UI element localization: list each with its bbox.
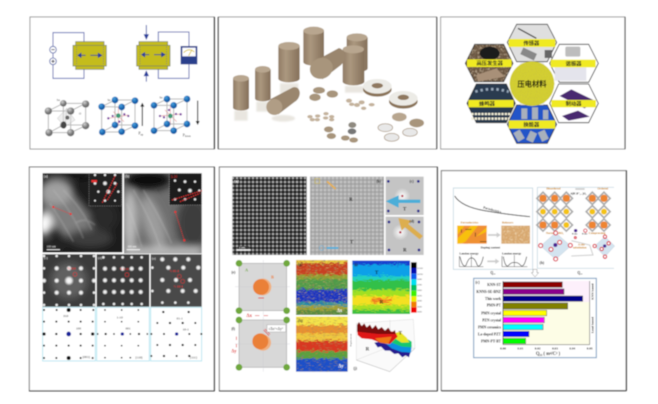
simulated pattern (h)	[150, 307, 202, 361]
bar chart (c): 0.03	[552, 346, 558, 350]
TEM image (b): 100 nm	[127, 244, 137, 248]
colour scale bar: 0.000	[417, 312, 422, 314]
bar chart (c): 0.01	[517, 346, 524, 350]
electron diffraction pattern (c)	[41, 254, 97, 307]
unit cell schematic (f): √Δx²+Δy²	[268, 327, 284, 331]
colour scale bar: 0.800	[417, 290, 422, 292]
phase diagram (a): Paraelectrics	[483, 205, 502, 214]
crystal structure (b): A-site	[578, 243, 585, 246]
unit cell schematic (f)	[231, 317, 290, 372]
bar chart (c): (c)	[475, 280, 480, 285]
bar chart (c): This work	[485, 297, 502, 301]
crystal structure (b): B site	[582, 233, 587, 236]
bar chart (c): 0.00	[500, 346, 506, 350]
panel: applications of piezoelectric materials hexagon diagram	[441, 17, 625, 149]
phase diagram (a): Q₃₃	[490, 271, 496, 275]
displacement heat map (g)	[295, 259, 348, 316]
delta x label: Δx	[246, 314, 252, 319]
floor reflections	[234, 83, 363, 122]
simulated pattern (g): 001	[126, 326, 131, 330]
hexagon: high-voltage generator: 高压发生器	[476, 59, 504, 67]
panel: TEM images and diffraction patterns	[29, 167, 214, 391]
polarisation contour map (i): R	[380, 300, 384, 305]
electron diffraction pattern (c): ½ 110	[68, 267, 76, 271]
simulated pattern (g)	[97, 307, 149, 361]
colour scale bar: 0.0720	[417, 274, 423, 276]
colour scale bar: 0.780	[417, 285, 422, 287]
unit cell schematic (f): Δy	[231, 350, 237, 355]
STEM image (b): (b)	[376, 179, 382, 183]
bar chart (c): Lead based	[590, 317, 594, 333]
phase diagram (a)	[453, 188, 533, 275]
TEM image (a): 100 nm	[47, 245, 56, 249]
polarisation contour map (i)	[352, 260, 411, 315]
phase diagram (a): Ferroelectrics	[461, 220, 479, 224]
electron diffraction pattern (e): ½ 01-1	[170, 269, 179, 273]
simulated pattern (h): [111]	[190, 356, 197, 360]
hexagon: buzzer	[467, 84, 515, 123]
panel: piezoelectric effect schematic	[30, 17, 214, 149]
unit cell schematic (e): B	[271, 275, 274, 280]
TEM image (a)	[42, 172, 124, 254]
TEM image (b)	[123, 172, 203, 254]
unit cell schematic (e)	[231, 260, 290, 315]
simulated pattern (g): [110]	[135, 355, 142, 359]
TEM image (a): (a)	[44, 174, 49, 178]
connector arrow	[531, 269, 539, 277]
3D surface plot (j): (j)	[353, 366, 358, 370]
crystal structure (b): Disordered	[546, 187, 561, 191]
colour scale bar: 0.070	[417, 295, 422, 297]
TEM image (b): (b)	[125, 174, 130, 178]
STEM image (b)	[310, 177, 384, 255]
colour scale bar: 0.060	[417, 301, 422, 303]
displacement heat map (h): (h)	[298, 319, 303, 323]
bar chart (c): KNN based	[590, 283, 594, 300]
bar chart (c): La-doped PZT	[478, 332, 502, 336]
electron diffraction pattern (d): ½ 1-11	[120, 267, 129, 271]
displacement heat map (g): Δx	[337, 309, 343, 314]
delta x label	[246, 314, 268, 319]
crystal structure (b): Ordered	[597, 187, 609, 191]
crystal cube: polarisation up: up	[141, 133, 144, 136]
electron diffraction pattern (d)	[97, 254, 149, 307]
electron diffraction pattern (e)	[150, 254, 202, 307]
simulated pattern (g): 1-10	[117, 315, 123, 319]
bar chart (c)	[474, 278, 596, 358]
hexagon: sensor	[507, 24, 557, 62]
colour scale bar	[411, 262, 423, 314]
crystal cube: polarisation up: Sn	[107, 98, 111, 102]
crystal cube: polarisation up	[98, 97, 144, 136]
polarisation contour map (i): T	[375, 271, 379, 276]
displacement heat map (h)	[295, 316, 348, 372]
crystal cube: polarisation down: down	[185, 135, 191, 138]
electron diffraction pattern (e): (e)	[152, 256, 156, 260]
crystal structure (b): A(B'ₓB''₁₋ₓ)O₃	[570, 192, 587, 195]
electron diffraction pattern (d): (d)	[98, 256, 102, 260]
simulated pattern (f): 010	[63, 314, 69, 318]
3D surface plot (j): Displacement	[350, 333, 353, 347]
crystal structure (b): B site	[572, 233, 577, 236]
bar chart (c): PZN crystal	[482, 318, 501, 322]
STEM image (b): R	[349, 198, 353, 203]
unit cell schematic (f): (f)	[231, 327, 236, 331]
crystal cube: gray cubic phase: O	[79, 112, 82, 116]
circuit: inverse piezoelectric effect	[50, 33, 106, 78]
simulated pattern (h): 10-1	[183, 328, 189, 332]
3D surface plot (j)	[350, 319, 415, 372]
bar chart (c): PMN-PT-BT	[481, 339, 502, 343]
electron diffraction pattern (e): ½ 10-1	[174, 285, 183, 289]
crystal structure (b): substitution	[573, 247, 587, 250]
hexagon: transducer	[507, 105, 557, 143]
crystal structure (b): Compressing	[589, 231, 606, 235]
3D surface plot (j): R	[366, 348, 370, 353]
electron diffraction pattern (c): (c)	[44, 256, 48, 260]
displacement heat map (g): (g)	[298, 262, 303, 266]
phase diagram (a): Relaxors	[502, 220, 514, 224]
zoomed unit cell (d): R	[403, 249, 407, 254]
centre: piezoelectric materials	[509, 61, 555, 106]
hexagon: actuator: 制动器	[566, 100, 582, 108]
colour scale bar: 0.000	[417, 306, 422, 308]
phase diagram (a): Landau energy	[459, 251, 479, 255]
ceramic disks	[307, 87, 424, 143]
circuit: direct piezoelectric effect with meter	[137, 25, 197, 82]
zoomed unit cell (d)	[386, 217, 424, 255]
bar chart (c): PMN-PT	[487, 304, 502, 308]
unit cell schematic (e): A	[245, 268, 249, 273]
simulated pattern (f)	[42, 307, 95, 361]
STEM image (a)	[232, 177, 307, 255]
centre: piezoelectric materials: 压电材料	[517, 79, 547, 88]
crystal cube: gray cubic phase	[45, 98, 89, 136]
crystal structure (b): Q₃₃	[577, 271, 583, 275]
simulated pattern (f): 100	[76, 326, 81, 330]
crystal cube: polarisation up: P	[138, 131, 141, 136]
zoomed unit cell (c): T	[403, 207, 407, 212]
hexagon: resonator	[550, 44, 598, 82]
simulated pattern (h): 01-1	[177, 316, 183, 320]
bar chart (c): PMN crystal	[481, 311, 501, 315]
hexagon: actuator	[550, 84, 598, 123]
panel: atomic-resolution STEM and polarisation maps	[219, 167, 437, 391]
hexagon: transducer: 换能器	[523, 120, 540, 128]
unit cell schematic (e): (e)	[231, 270, 236, 274]
hexagon: resonator: 谐振器	[566, 59, 582, 67]
ceramic rings	[363, 79, 418, 109]
crystal structure (b): Normal ABO₃	[546, 231, 564, 235]
panel: piezoelectric ceramic products photo	[218, 17, 437, 149]
colour scale bar: 0.080	[417, 279, 422, 281]
hexagon: sensor: 传感器	[523, 39, 540, 47]
phase diagram (a): Doping content	[481, 246, 500, 250]
crystal cube: polarisation down	[151, 96, 200, 138]
crystal structure (b)	[537, 187, 615, 275]
displacement heat map (h): Δy	[338, 364, 344, 369]
polarisation contour map (i): (i)	[354, 263, 359, 267]
panel: phase diagram and electrostrictive coefficient comparison	[441, 171, 626, 391]
bar chart (c): KNNS-SE-BNZ	[476, 290, 502, 294]
STEM image (a): 2 nm	[239, 245, 246, 249]
STEM image (a): (a)	[234, 179, 239, 183]
bar chart (c): PMN ceramics	[478, 325, 502, 329]
3D surface plot (j): T	[399, 331, 403, 336]
crystal cube: polarisation down: P	[183, 132, 185, 137]
zoomed unit cell (c): (c)	[410, 180, 414, 184]
simulated pattern (f): [001]	[83, 355, 90, 359]
bar chart (c): 0.05	[587, 346, 593, 350]
zoomed unit cell (c)	[386, 177, 424, 215]
crystal cube: polarisation down: Sn	[159, 96, 163, 100]
bar chart (c): KNN-ST	[487, 283, 502, 287]
bar chart (c): Q₃₃ ( m⁴/C² )	[536, 351, 561, 357]
phase diagram (a): Landau energy	[502, 251, 522, 255]
hexagon: buzzer: 蜂鸣器	[479, 99, 496, 107]
crystal cube: gray cubic phase: Sn	[57, 98, 60, 102]
TEM image (b): 3-10	[171, 175, 178, 179]
ceramic cylinders	[233, 27, 368, 118]
colour scale bar: 0.1100	[417, 268, 423, 270]
hexagon: high-voltage generator	[465, 44, 513, 82]
zoomed unit cell (d): (d)	[410, 219, 415, 223]
bar chart (c): 0.04	[569, 346, 576, 350]
crystal structure (b): (b)	[540, 261, 545, 265]
STEM image (b): T	[350, 241, 354, 246]
bar chart (c): 0.02	[535, 346, 541, 350]
